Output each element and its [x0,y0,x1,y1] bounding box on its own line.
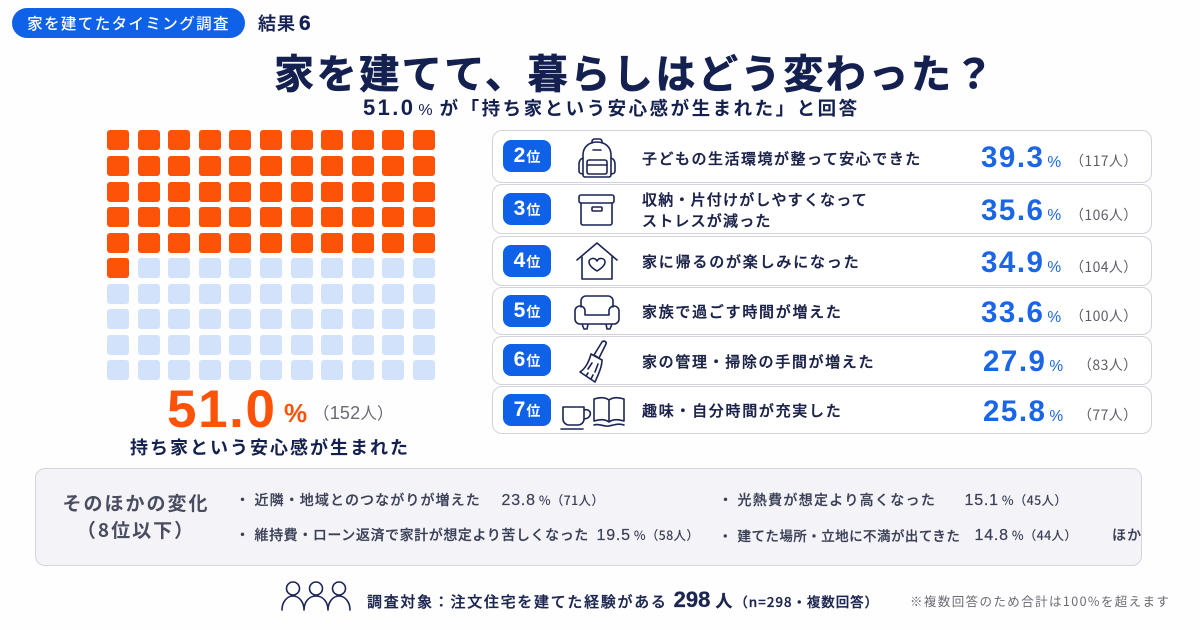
top result label: 持ち家という安心感が生まれた [130,434,410,460]
icon: backpack [578,138,616,178]
survey target: 調査対象：注文住宅を建てた経験がある 298 人（n=298・複数回答） [367,587,879,612]
panel: other changes: ・ [718,525,732,545]
item: utility cost [718,490,1067,510]
panel: rank 5 [492,287,1152,335]
item: neighbourhood [236,490,604,510]
note: others: ほか [1112,525,1142,545]
count 7: （77人） [1078,405,1138,425]
panel: rank 3 [492,184,1152,234]
badge: survey name [12,8,245,38]
item: neighbourhood: 近隣・地域とのつながりが増えた [254,490,481,510]
label 5: 家族で過ごす時間が増えた [642,301,843,322]
percent 4: 34.9% [981,246,1061,279]
percent 6: 27.9% [983,345,1063,378]
count 2: （117人） [1070,151,1138,171]
icon: three people [281,581,351,611]
item: location: 14.8%（44人） [974,525,1077,544]
percent 7: 25.8% [983,395,1063,428]
panel: rank 2 [492,130,1152,183]
rank badge 5: 5位 [514,299,540,322]
panel: other changes: ・ [718,490,732,510]
icon: house with heart [576,242,618,280]
item: utility cost: 15.1%（45人） [964,490,1067,509]
item: maintenance cost: 維持費・ローン返済で家計が想定より苦しくなった [254,525,589,545]
count 4: （104人） [1070,257,1138,277]
percent 5: 33.6% [981,296,1061,329]
subtitle: 51.0% が「持ち家という安心感が生まれた」と回答 [363,95,860,121]
waffle chart: 51.0% of respondents [107,130,435,380]
panel: other changes [35,468,1142,566]
label 3: 収納・片付けがしやすくなって [642,189,868,210]
count 6: （83人） [1078,355,1138,375]
item: location [718,525,1077,545]
item: neighbourhood: 23.8%（71人） [502,490,604,509]
panel: rank 6 [492,336,1152,385]
title: 家を建てて、暮らしはどう変わった？ [274,42,996,100]
top result figure: 51.0% [167,380,394,439]
rank badge 7: 7位 [514,398,540,421]
icon: sofa [574,295,620,330]
item: location: 建てた場所・立地に不満が出てきた [738,525,960,545]
label 6: 家の管理・掃除の手間が増えた [642,351,875,372]
panel: rank 4 [492,236,1152,286]
heading: other changes [62,489,210,543]
panel: rank 7 [492,386,1152,434]
rank badge 6: 6位 [514,348,540,371]
percent 3: 35.6% [981,194,1061,227]
icon: cup and book [560,396,625,430]
label: result number: 結果6 [258,10,312,36]
label 3: ストレスが減った [642,210,772,231]
rank badge 7 [503,394,551,426]
heading: other changes: （8位以下） [77,516,195,543]
item: maintenance cost: 19.5%（58人） [596,525,699,544]
icon: broom [579,340,608,383]
rank badge 5 [503,295,551,327]
count 3: （106人） [1070,205,1138,225]
top result figure: 51.0%: 51.0 [167,380,277,439]
footnote: ※複数回答のため合計は100%を超えます [910,591,1170,610]
icon: storage box [578,194,615,226]
rank badge 4 [503,245,551,277]
heading: other changes: そのほかの変化 [62,489,210,516]
top result figure: 51.0%: （152人） [313,400,394,424]
label 4: 家に帰るのが楽しみになった [642,251,860,272]
panel: other changes: ・ [236,490,250,510]
rank badge 2: 2位 [514,144,540,167]
panel: other changes: ・ [236,525,250,545]
label 3 [642,189,868,231]
count 5: （100人） [1070,306,1138,326]
rank badge 3 [503,193,551,225]
rank badge 2 [503,140,551,172]
badge: survey name: 家を建てたタイミング調査 [27,12,230,34]
top result figure: 51.0%: % [284,398,307,428]
label 2: 子どもの生活環境が整って安心できた [642,148,922,169]
item: utility cost: 光熱費が想定より高くなった [738,490,936,510]
rank badge 4: 4位 [514,249,540,272]
label 7: 趣味・自分時間が充実した [642,400,842,421]
percent 2: 39.3% [981,141,1061,174]
rank badge 6 [503,344,551,376]
rank badge 3: 3位 [514,197,540,220]
